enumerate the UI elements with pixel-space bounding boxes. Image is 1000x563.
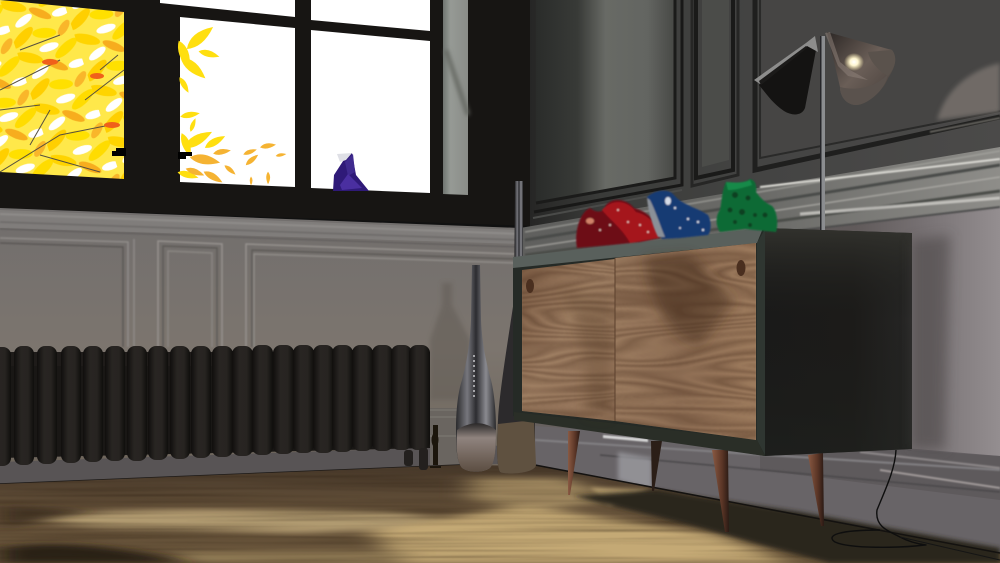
lamp light pool on wall [937, 63, 1000, 120]
sideboard front frame [513, 228, 765, 456]
vignette on lower right wall [912, 235, 950, 450]
baseboard right [535, 426, 1000, 553]
door split line [614, 258, 616, 421]
right sliding door [615, 243, 756, 440]
window handles [112, 148, 192, 159]
radiator [0, 345, 441, 470]
window reveal [443, 0, 468, 195]
floor boards and sunlight [0, 465, 1000, 563]
sideboard bottom rail [514, 412, 765, 456]
sideboard top edge [513, 228, 763, 268]
pane: left with autumn leaves [0, 0, 124, 179]
power cable [832, 450, 926, 547]
lamp shade right [825, 32, 895, 105]
lamp pole [820, 36, 825, 230]
wainscot panels [0, 238, 515, 347]
chair rail moulding [520, 147, 1000, 262]
window [0, 0, 468, 195]
wood floor [0, 465, 1000, 563]
frog: green [717, 179, 777, 232]
baseboard left [0, 408, 520, 484]
vase: rear chrome [497, 181, 536, 474]
frog: blue [647, 191, 711, 239]
dark wall around window [0, 0, 535, 226]
radiator valve [430, 425, 441, 468]
wall panel narrow [692, 0, 738, 186]
door finger holes [526, 260, 746, 293]
right wall lower [520, 200, 1000, 470]
left wall with wainscoting [0, 208, 520, 490]
sideboard [513, 228, 1000, 560]
baseboard gap line [535, 465, 1000, 553]
table lamp [754, 32, 895, 230]
sideboard side face [765, 228, 912, 456]
lamp shade left [754, 36, 818, 114]
purple origami figure [333, 153, 369, 191]
frog: red [576, 200, 660, 248]
radiator feet [404, 448, 428, 470]
vase: front chrome [456, 265, 496, 472]
wall panel left lit [533, 0, 682, 218]
pane: top centre [160, 0, 295, 17]
right wall upper [530, 0, 1000, 240]
lamp bulb glow [844, 53, 864, 71]
pane: centre with leaves [175, 17, 295, 187]
wainscot cap moulding [0, 210, 520, 247]
left sliding door [522, 259, 615, 421]
pane: top right [311, 0, 430, 31]
vase shadow on wall [430, 283, 470, 400]
sideboard legs [568, 431, 824, 532]
pane: right [311, 30, 430, 193]
sideboard floor shadow [573, 490, 1000, 563]
wall panel right [755, 0, 1000, 170]
